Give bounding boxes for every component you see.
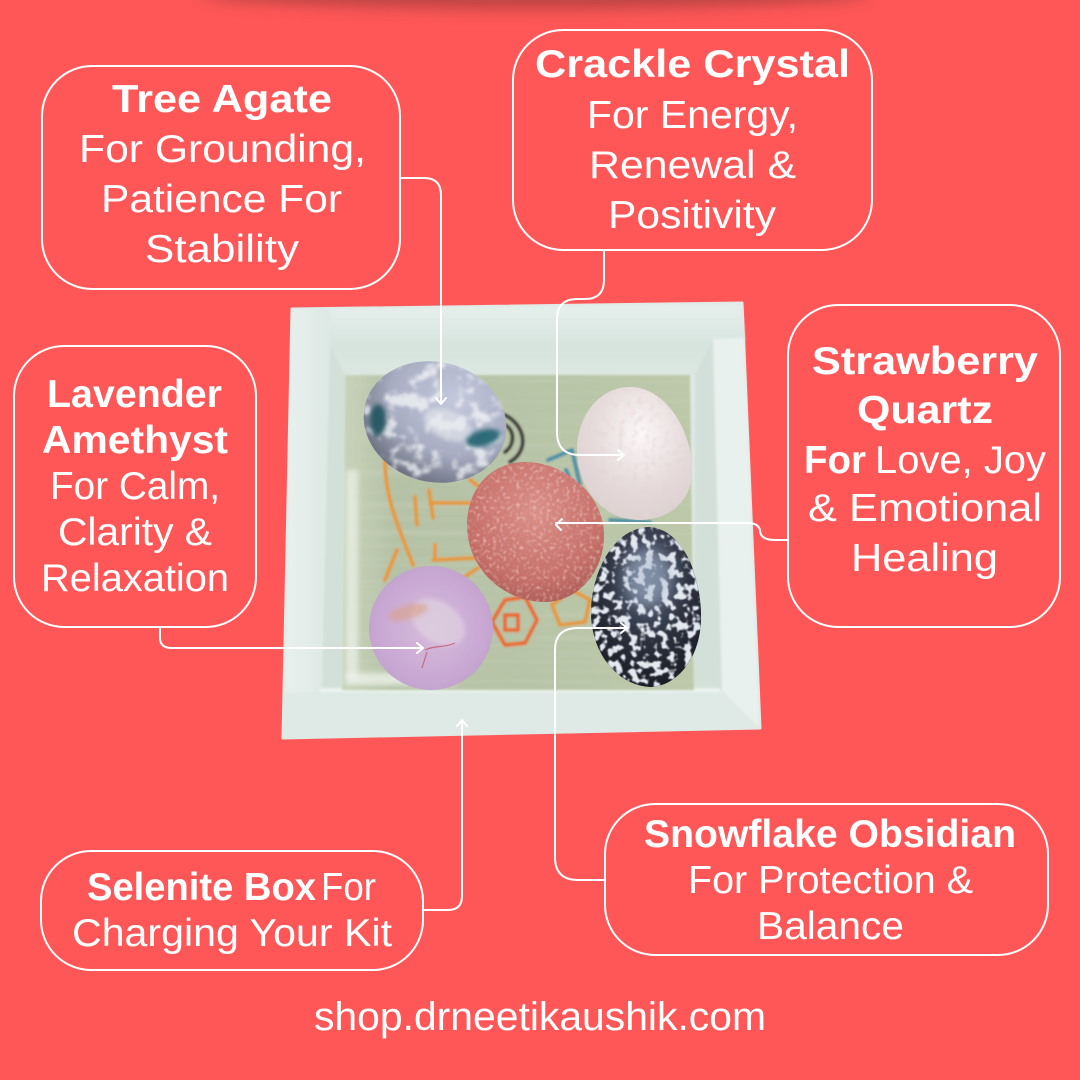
callout: Strawberry Quartz: Quartz <box>857 389 993 432</box>
callout: Tree Agate: For Grounding, <box>79 128 366 171</box>
arrow: Selenite Box <box>423 720 467 910</box>
arrow: Crackle Crystal <box>557 250 624 460</box>
arrow: Tree Agate <box>400 178 446 404</box>
callout: Crackle Crystal <box>513 30 872 250</box>
website url: shop.drneetikaushik.com <box>314 995 766 1039</box>
callout: Crackle Crystal: Renewal & <box>589 144 796 187</box>
callout: Snowflake Obsidian: Balance <box>757 905 904 948</box>
stone: snowflake obsidian <box>591 527 701 687</box>
stone: tree agate <box>351 346 519 498</box>
callout: Lavender Amethyst: Relaxation <box>41 557 229 600</box>
arrow: Snowflake Obsidian <box>555 623 627 880</box>
callout: Selenite Box <box>41 851 423 970</box>
arrow: Lavender Amethyst <box>160 627 423 653</box>
callout: Selenite Box: For <box>321 866 376 909</box>
callout: Snowflake Obsidian: For Protection & <box>688 859 973 902</box>
callout: Selenite Box: Selenite Box <box>87 866 316 909</box>
box floor with doodles <box>342 375 694 690</box>
callout: Tree Agate: Patience For <box>101 178 342 221</box>
callout: Snowflake Obsidian <box>605 804 1048 955</box>
callout: Tree Agate: Stability <box>145 228 300 271</box>
callout: Strawberry Quartz: Love, Joy <box>875 439 1047 482</box>
callout: Strawberry Quartz: & Emotional <box>808 487 1042 530</box>
callout: Strawberry Quartz: For <box>804 439 866 482</box>
callout: Tree Agate <box>42 66 400 289</box>
photo: selenite box with crystals <box>283 303 760 738</box>
top edge shadow <box>200 0 870 8</box>
callout: Lavender Amethyst: Clarity & <box>58 511 212 554</box>
callout: Lavender Amethyst: For Calm, <box>50 465 220 508</box>
callout: Crackle Crystal: Crackle Crystal <box>535 43 850 86</box>
callout: Tree Agate: Tree Agate <box>112 78 332 121</box>
callout: Strawberry Quartz <box>788 305 1060 627</box>
selenite box <box>283 303 760 738</box>
arrow: Strawberry Quartz <box>556 519 788 540</box>
callout: Snowflake Obsidian: Snowflake Obsidian <box>644 813 1016 856</box>
callout: Selenite Box: Charging Your Kit <box>72 912 392 955</box>
callout: Strawberry Quartz: Strawberry <box>812 340 1038 383</box>
callout: Crackle Crystal: Positivity <box>608 194 777 237</box>
callout: Lavender Amethyst: Lavender <box>47 373 222 416</box>
stone: strawberry quartz <box>467 462 604 602</box>
stone: crackle crystal <box>577 387 692 520</box>
callout: Strawberry Quartz: Healing <box>851 537 998 580</box>
callout: Lavender Amethyst <box>14 346 256 627</box>
callout: Lavender Amethyst: Amethyst <box>42 419 228 462</box>
stone: lavender amethyst <box>369 566 493 690</box>
callout: Crackle Crystal: For Energy, <box>587 94 798 137</box>
